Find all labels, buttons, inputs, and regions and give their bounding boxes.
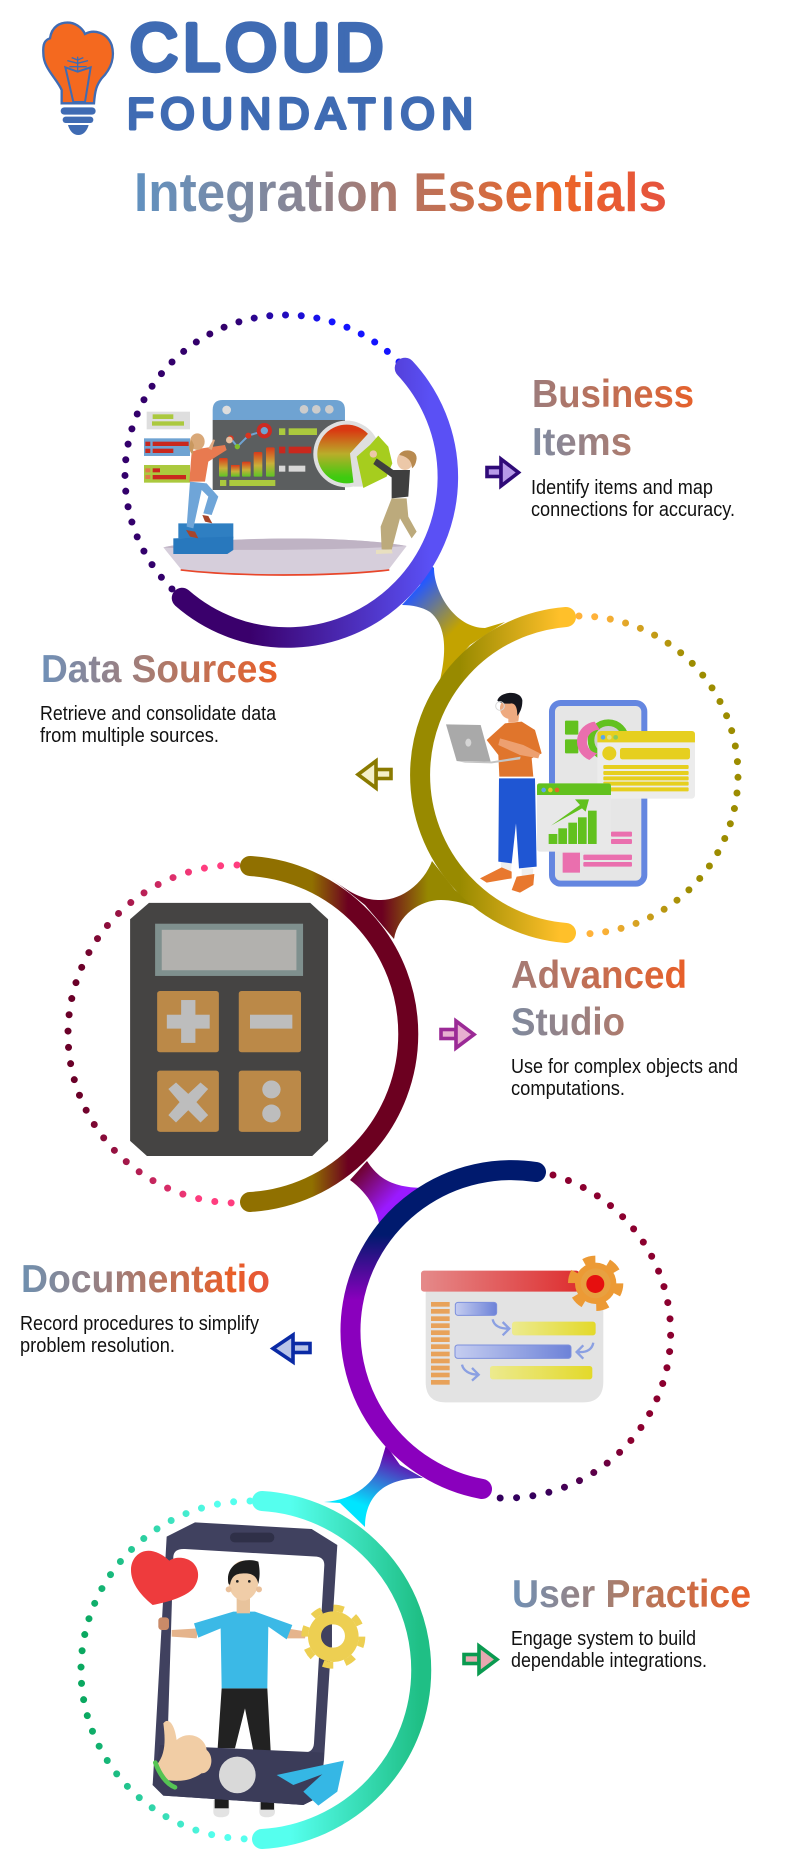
heading: Advanced Studio xyxy=(511,954,687,1044)
heading: Advanced Studio: Studio xyxy=(511,1001,625,1044)
arrow: right magenta xyxy=(441,1021,474,1048)
dashboard window xyxy=(213,400,345,490)
steps xyxy=(173,523,233,554)
pie chart xyxy=(313,421,392,488)
arrow: right purple xyxy=(487,459,518,486)
window card xyxy=(426,1290,603,1402)
text: Advanced Studio body: computations. xyxy=(511,1078,625,1100)
red title bar xyxy=(421,1271,579,1292)
heading: Business Items: Items xyxy=(532,421,632,464)
platform xyxy=(163,538,407,575)
text: Business Items body xyxy=(531,477,735,521)
arc 1 xyxy=(182,368,448,638)
logo wordmark: FOUNDATION xyxy=(127,90,473,138)
dotted ring 1 xyxy=(125,315,399,589)
text: User Practice body xyxy=(511,1628,707,1672)
orange list xyxy=(431,1302,450,1385)
heading: Data Sources: Data Sources xyxy=(41,648,278,691)
icon: paper plane xyxy=(277,1761,344,1806)
logo wordmark: CLOUD xyxy=(130,10,383,84)
arrow: left olive xyxy=(358,761,391,788)
text: Data Sources body: Retrieve and consolidate data xyxy=(40,703,277,725)
dotted ring 4 xyxy=(487,1175,671,1498)
illustration: man in phone xyxy=(131,1522,362,1817)
person xyxy=(446,693,542,893)
text: Business Items body: Identify items and map xyxy=(531,477,713,499)
pink list xyxy=(563,832,632,873)
arc 5 xyxy=(262,1501,421,1839)
dotted ring 3 xyxy=(68,865,237,1203)
dotted ring 2 xyxy=(579,616,738,934)
heading: Documentation: Documentatio xyxy=(21,1258,270,1301)
connector: ring 1 to ring 2 xyxy=(402,562,505,680)
connector: ring 2 to ring 3 xyxy=(331,861,478,939)
illustration: dashboard team xyxy=(144,400,417,575)
phone bottom panel xyxy=(153,1745,324,1805)
illustration: workflow window xyxy=(421,1260,619,1402)
calculator screen xyxy=(155,924,303,976)
dotted ring 5 xyxy=(81,1501,250,1839)
heading: Advanced Studio: Advanced xyxy=(511,954,687,997)
text: Advanced Studio body xyxy=(511,1056,738,1100)
logo xyxy=(43,10,473,138)
arrow: left blue xyxy=(273,1335,310,1362)
heading: User Practice: User Practice xyxy=(512,1573,751,1616)
arrow: right green xyxy=(464,1646,497,1673)
text: Advanced Studio body: Use for complex objects and xyxy=(511,1056,738,1078)
icon: hand xyxy=(155,1721,211,1787)
text: Data Sources body: from multiple sources. xyxy=(40,725,219,747)
arc 3 xyxy=(250,866,408,1202)
calculator buttons xyxy=(157,991,301,1132)
speaker xyxy=(230,1533,274,1542)
heading: Business Items: Business xyxy=(532,373,694,416)
text: User Practice body: dependable integrations. xyxy=(511,1650,707,1672)
flow bars xyxy=(455,1302,596,1381)
side cards xyxy=(144,412,190,483)
icon: yellow gear xyxy=(305,1608,362,1665)
yellow card xyxy=(597,731,695,799)
icon: orange gear xyxy=(572,1260,619,1307)
heading: Business Items xyxy=(532,373,694,464)
text: Business Items body: connections for accuracy. xyxy=(531,499,735,521)
arc 4 xyxy=(350,1170,536,1489)
phone panel xyxy=(552,703,644,884)
green chart card xyxy=(537,783,611,852)
icon: light bulb xyxy=(43,23,113,135)
text: User Practice body: Engage system to build xyxy=(511,1628,696,1650)
text: Data Sources body xyxy=(40,703,277,747)
text: Documentation body: problem resolution. xyxy=(20,1335,175,1357)
connector: ring 4 to ring 5 xyxy=(324,1445,423,1527)
phone body xyxy=(153,1522,337,1805)
arc 2 xyxy=(420,617,566,933)
woman xyxy=(186,433,233,538)
connector: ring 3 to ring 4 xyxy=(350,1161,425,1242)
man xyxy=(370,450,417,554)
man xyxy=(158,1560,307,1751)
text: Documentation body xyxy=(20,1313,259,1357)
logo wordmark xyxy=(127,10,473,138)
icon: heart xyxy=(131,1551,198,1605)
phone shoes xyxy=(213,1798,275,1817)
illustration: calculator xyxy=(130,903,328,1156)
text: Documentation body: Record procedures to simplify xyxy=(20,1313,259,1335)
title: Integration Essentials xyxy=(134,161,667,223)
home button xyxy=(219,1757,256,1793)
illustration: analyst with laptop xyxy=(446,693,695,893)
